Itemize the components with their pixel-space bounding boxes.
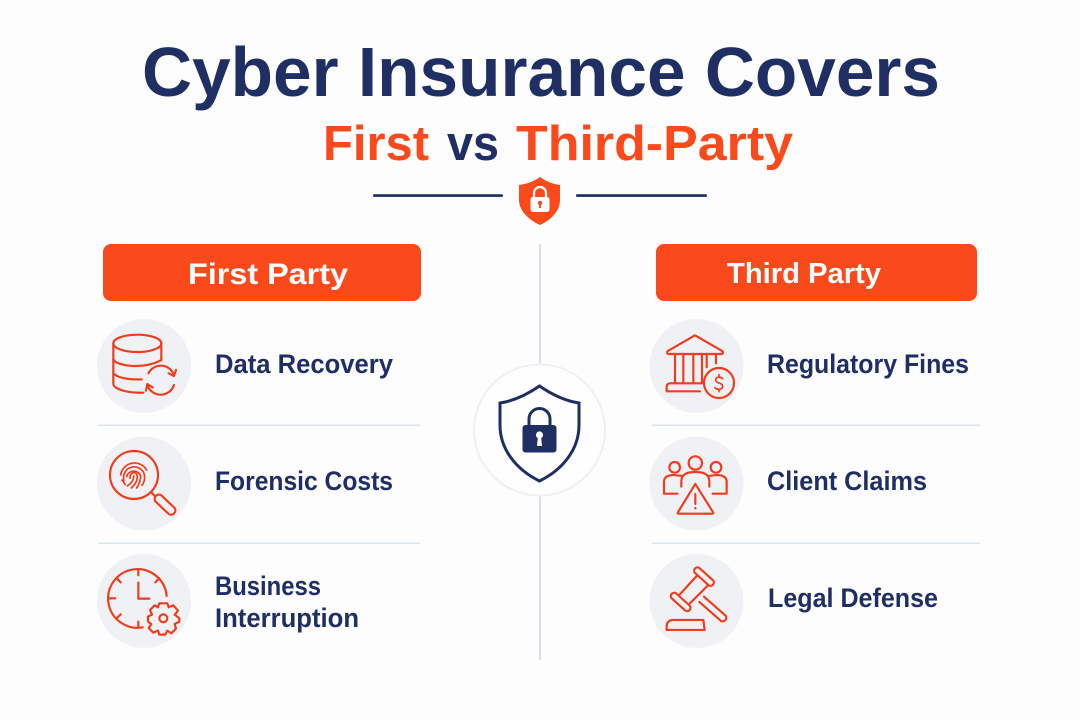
panel: third party: [650, 244, 980, 648]
vertical center divider: [539, 244, 541, 660]
first party header: [103, 244, 421, 301]
first party header: First Party: [188, 258, 348, 291]
subtitle: [323, 117, 793, 171]
label: business interruption: Business: [215, 571, 321, 601]
icon: regulatory fines: [650, 319, 744, 413]
subtitle: Third-Party: [516, 117, 793, 171]
row dividers: [98, 424, 420, 544]
row dividers: [652, 424, 980, 544]
label: forensic costs: Forensic Costs: [215, 466, 393, 496]
title divider with shield icon: [373, 177, 707, 225]
subtitle: vs: [447, 117, 499, 171]
subtitle: First: [323, 117, 429, 171]
label: client claims: Client Claims: [767, 466, 927, 496]
label: business interruption: [215, 571, 359, 633]
label: regulatory fines: Regulatory Fines: [767, 349, 969, 379]
label: business interruption: Interruption: [215, 603, 359, 633]
title: Cyber Insurance Covers: [142, 33, 940, 111]
label: data recovery: Data Recovery: [215, 349, 393, 379]
third party header: [656, 244, 977, 301]
third party header: Third Party: [727, 258, 881, 290]
icon: business interruption: [97, 554, 191, 648]
icon: forensic costs: [97, 436, 191, 530]
icon: data recovery: [97, 319, 191, 413]
icon: client claims: [650, 436, 744, 530]
icon: legal defense: [650, 554, 744, 648]
panel: first party: [97, 244, 421, 648]
center shield badge: [474, 364, 605, 496]
label: legal defense: Legal Defense: [768, 583, 938, 613]
